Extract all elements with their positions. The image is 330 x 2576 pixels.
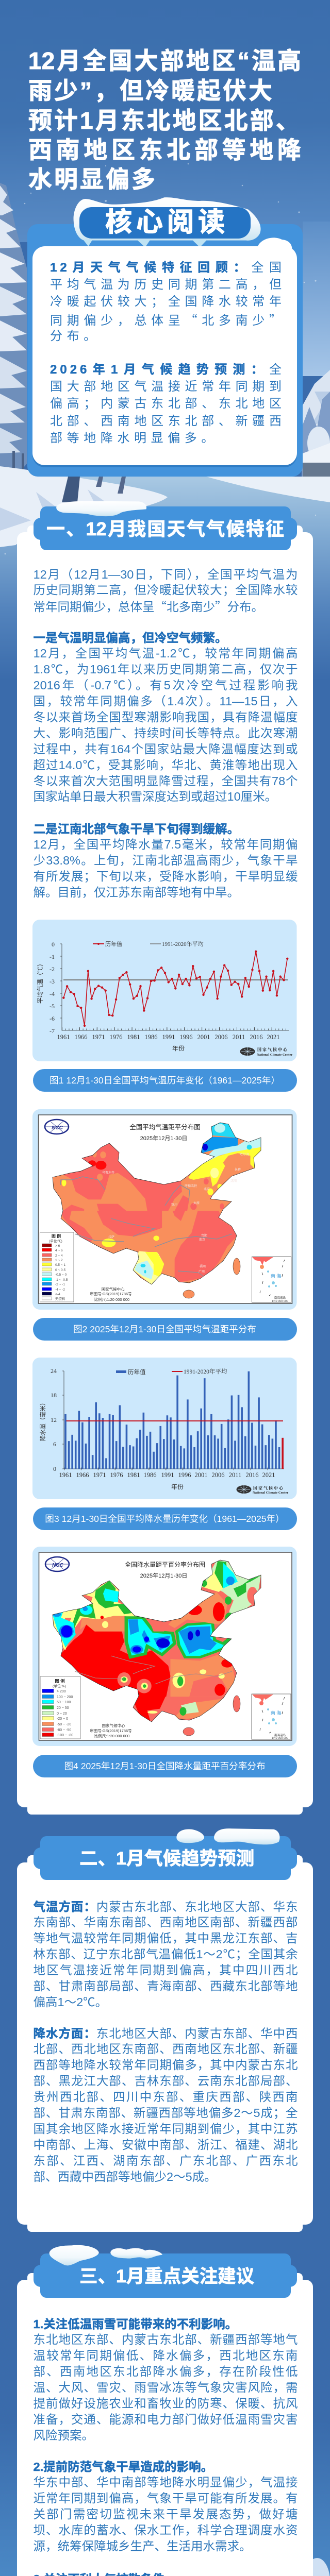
title: 12月全国大部地区“温高 — [28, 47, 301, 74]
text: January outlook: 偏高；内蒙古东北部、东北地区 — [50, 397, 285, 411]
legend: precipitation anomaly — [40, 1676, 80, 1739]
text: January outlook: 北部、西南地区东北部、新疆西 — [50, 414, 285, 428]
x axis labels: 1976 — [110, 1471, 123, 1479]
text: advice one: 准备，交通、能源和电力部门做好低温雨雪灾害 — [33, 2413, 298, 2426]
city labels: 银川 — [171, 1202, 177, 1207]
logo: National Climate Center: 国家气候中心 — [253, 1485, 284, 1490]
text: temperature findings: 2016年（-0.7℃）。有5次冷空气过程影响我 — [33, 679, 298, 692]
heading: section three — [34, 2245, 297, 2298]
city labels: 北京 — [204, 1187, 210, 1191]
legend: temperature anomaly: -2 ~ -1 — [55, 1283, 65, 1286]
text: precipitation outlook: 东部、江西、湖南东部、广东北部、广西东北 — [33, 2154, 298, 2167]
city labels: 乌鲁木齐 — [102, 1171, 114, 1175]
text: drought findings — [33, 822, 298, 899]
inset: South China Sea: 1:40 000 000 — [272, 1300, 288, 1303]
x axis labels: 2011 — [233, 1033, 245, 1041]
x axis labels: 1961 — [57, 1033, 70, 1041]
text: advice two — [33, 2460, 298, 2553]
logo: National Climate Center: National Climate Center — [257, 1053, 292, 1057]
legend: precipitation anomaly: 0 ~ 20 — [57, 1712, 67, 1716]
y axis labels: 24 — [51, 1367, 57, 1375]
caption: figure 1 — [33, 1069, 297, 1092]
text: January outlook: 部等地降水明显偏多。 — [50, 431, 218, 445]
y axis title: 平均气温（℃） — [36, 960, 44, 1004]
text: section one intro: 12月（12月1—30日，下同），全国平均气温为 — [33, 568, 298, 581]
text: advice one: 提前做好设施农业和畜牧业的防寒、保暖、抗风 — [33, 2397, 298, 2410]
legend: precipitation anomaly: 图 例 — [55, 1679, 65, 1684]
legend: temperature chart: 历年值 — [105, 940, 122, 947]
x axis labels: 2016 — [250, 1033, 263, 1041]
legend: precipitation anomaly: -50 ~ -20 — [57, 1723, 71, 1726]
x axis labels: 2021 — [262, 1471, 275, 1479]
legend: temperature anomaly: 图 例 — [52, 1233, 61, 1239]
text: drought findings: 解。目前，仅江苏东南部等地有中旱。 — [33, 886, 239, 899]
text: temperature outlook: 部、甘肃南部局部、青海南部、西藏东北部等地 — [33, 1979, 298, 1993]
x axis labels: 1981 — [127, 1471, 140, 1479]
text: precipitation outlook: 中南部、上海、安徽中南部、浙江、福建、湖北 — [33, 2138, 298, 2151]
text: precipitation outlook: 北部、西北地区东南部、西南地区东北部、新疆 — [33, 2042, 298, 2056]
x axis labels: 1996 — [179, 1033, 193, 1041]
legend: temperature anomaly — [40, 1232, 74, 1302]
text: precipitation outlook: 降水方面：东北地区大部、内蒙古东部、华中西 — [33, 2027, 298, 2040]
map: precipitation anomaly percentage distribution — [32, 1547, 297, 1746]
text: temperature findings: 国，较常年同期偏多（1.4次）。11—15日，入 — [33, 694, 298, 708]
map credits — [90, 1723, 132, 1738]
text: drought findings: 二是江南北部气象干旱下旬得到缓解。 — [33, 822, 239, 836]
outline and rivers — [53, 1560, 261, 1722]
map credits: 国家气候中心 — [102, 1723, 125, 1728]
heading: section two: 二、1月气候趋势预测 — [79, 1848, 254, 1869]
y axis labels: -6 — [50, 1015, 55, 1022]
text: drought findings: 12月，全国平均降水量7.5毫米，较常年同期偏 — [33, 838, 298, 851]
text: temperature outlook: 林东部、辽宁东北部气温偏低1～2℃；全国其余 — [33, 1947, 298, 1961]
inset: South China Sea: 南海诸岛 — [274, 1733, 286, 1737]
icon: right forest and cabin — [296, 392, 330, 479]
text: temperature findings: 过程中，共有164个国家站最大降温幅度达到或 — [33, 742, 298, 756]
inset: South China Sea — [252, 1694, 291, 1740]
text: precipitation outlook: 部、黑龙江大部、吉林东部、云南东北部局部、 — [33, 2074, 298, 2088]
text: precipitation outlook: 部、甘肃东南部、新疆西部等地偏多2～5成；全 — [33, 2106, 298, 2120]
y axis title: 降水量（毫米） — [39, 1400, 46, 1441]
inset: South China Sea — [252, 1257, 291, 1303]
title — [28, 47, 302, 193]
text: temperature findings: 12月，全国平均气温-1.2℃，较常年同期偏高 — [33, 647, 298, 660]
bar chart: national mean precipitation 1961-2025 — [32, 1358, 297, 1499]
y axis labels: 18 — [51, 1392, 57, 1399]
text: temperature findings: 一是气温明显偏高，但冷空气频繁。 — [33, 631, 227, 644]
city labels: 拉萨 — [108, 1235, 114, 1239]
text: advice two: 近常年同期到偏高，气象干旱可能有所发展。有 — [33, 2492, 298, 2505]
text: temperature outlook: 气温方面：内蒙古东北部、东北地区大部、华东 — [33, 1900, 298, 1913]
x axis labels: 1991 — [161, 1471, 174, 1479]
legend: precipitation anomaly: -80 ~ -50 — [57, 1728, 71, 1732]
caption: figure 3: 图3 12月1-30日全国平均降水量历年变化（1961—2025年） — [45, 1514, 285, 1524]
legend: precipitation anomaly: 20 ~ 50 — [57, 1706, 69, 1710]
x axis labels: 1981 — [127, 1033, 140, 1041]
map credits: 比例尺:1:20 000 000 — [94, 1733, 129, 1738]
text: section one intro — [33, 568, 298, 615]
caption: figure 4 — [33, 1755, 297, 1777]
legend: temperature anomaly: 1 ~ 2 — [55, 1259, 63, 1262]
legend: temperature anomaly: 无资料 — [55, 1296, 65, 1301]
outline and rivers — [53, 1123, 261, 1284]
city labels — [102, 1153, 249, 1274]
legend: temperature chart: 1991-2020年平均 — [162, 940, 204, 947]
text: advice one: 部、西南地区东北部降水偏多，存在阶段性低 — [33, 2365, 298, 2378]
text: advice one: 1.关注低温雨雪可能带来的不利影响。 — [33, 2317, 237, 2331]
x axis labels: 1971 — [92, 1033, 105, 1041]
caption: figure 3 — [33, 1507, 297, 1530]
y axis labels — [51, 1367, 57, 1472]
y axis labels: 12 — [51, 1416, 57, 1423]
y axis labels: -1 — [50, 953, 55, 960]
legend: temperature anomaly: -4 ~ -2 — [55, 1288, 65, 1292]
logo: NCC — [45, 1557, 69, 1571]
x axis labels: 2006 — [214, 1033, 228, 1041]
legend: precipitation chart: 历年值 — [128, 1368, 146, 1376]
icon: right mountain — [302, 370, 330, 479]
text: section one intro: 常年同期偏少，总体呈“北多南少”分布。 — [33, 597, 263, 615]
x axis labels: 1986 — [144, 1033, 158, 1041]
x axis labels — [57, 1033, 279, 1041]
card: core reading white box — [32, 246, 297, 465]
text: advice one: 温较常年同期偏低、降水偏多，西北地区东南 — [33, 2349, 298, 2362]
text: temperature findings: 1.8℃，为1961年以来历史同期第二高，仅次于 — [33, 663, 298, 676]
icon: right side snow foliage — [299, 2558, 330, 2576]
text: advice one: 东北地区东部、内蒙古东北部、新疆西部等地气 — [33, 2333, 298, 2346]
text: advice one — [33, 2317, 298, 2442]
text: precipitation outlook: 贵州西北部、四川中东部、重庆西部、陕西南 — [33, 2090, 298, 2104]
bars — [65, 1371, 283, 1469]
text: temperature findings: 国家站单日最大积雪深度达到或超过10厘米。 — [33, 790, 277, 803]
inset: South China Sea: 1:40 000 000 — [272, 1737, 288, 1740]
legend: temperature anomaly: (单位:℃) — [49, 1239, 62, 1243]
line chart: national mean temperature 1961-2025 — [32, 920, 297, 1061]
x axis labels: 1991 — [162, 1033, 175, 1041]
city labels: 南京 — [199, 1238, 205, 1242]
map regions — [53, 1123, 261, 1284]
legend: temperature anomaly: <-4 — [55, 1293, 60, 1296]
x axis labels: 2016 — [245, 1471, 259, 1479]
text: temperature outlook: 等地气温较常年同期偏低，其中黑龙江东部、吉 — [33, 1931, 298, 1945]
text: December review: 分布。 — [50, 329, 101, 343]
title: 预计1月东北地区北部、 — [28, 107, 302, 134]
map title — [129, 1123, 201, 1142]
legend: temperature anomaly: > 6 — [55, 1244, 60, 1248]
y axis labels: 0 — [52, 941, 55, 948]
legend: precipitation anomaly: 100 ~ 200 — [57, 1696, 73, 1699]
text: January outlook: 国大部地区气温接近常年同期到 — [50, 380, 285, 394]
caption: figure 1: 图1 12月1-30日全国平均气温历年变化（1961—2025年） — [50, 1075, 280, 1086]
x axis labels: 1966 — [74, 1033, 88, 1041]
x axis labels: 1976 — [109, 1033, 123, 1041]
city labels: 合肥 — [201, 1233, 207, 1238]
legend: precipitation anomaly: > 200 — [57, 1690, 66, 1693]
inset: South China Sea: 南海诸岛 — [274, 1296, 286, 1300]
city labels: 福州 — [200, 1264, 206, 1268]
text: advice two: 关部门需密切监视未来干旱发展态势，做好塘 — [33, 2507, 298, 2521]
inset: South China Sea: 南 海 — [271, 1273, 281, 1279]
heading: section two — [34, 1828, 297, 1880]
map title: 2025年12月1-30日 — [140, 1134, 187, 1142]
caption: figure 2 — [33, 1318, 297, 1341]
text: precipitation outlook: 国其余地区降水接近常年同期到偏少，其中江苏 — [33, 2122, 298, 2136]
text: temperature findings: 超过14.0℃，受其影响，华北、黄淮等地出现入 — [33, 758, 298, 772]
text: temperature findings: 冬以来首场全国型寒潮影响我国，具有降温幅度 — [33, 710, 298, 724]
text: December review: 平均气温为历史同期第二高，但 — [50, 278, 285, 292]
x axis labels: 2011 — [229, 1471, 241, 1479]
logo: NCC: NCC — [52, 1563, 64, 1568]
logo: NCC: NCC — [52, 1125, 63, 1131]
series: yearly temperature — [63, 952, 287, 1026]
city labels: 太原 — [193, 1201, 200, 1205]
title: 西南地区东北部等地降 — [28, 137, 301, 163]
legend: precipitation chart — [116, 1368, 227, 1376]
heading: section three: 三、1月重点关注建议 — [79, 2266, 254, 2286]
legend: precipitation anomaly: -100 ~ -80 — [57, 1734, 73, 1737]
mean line — [66, 1420, 283, 1421]
map title: 全国平均气温距平分布图 — [129, 1123, 201, 1131]
snowflake dots — [5, 163, 317, 554]
icon: snow pine tree — [0, 183, 27, 482]
text: advice two: 源，统筹保障城乡生产、生活用水需求。 — [33, 2539, 252, 2553]
heading: core reading pill — [79, 207, 251, 239]
text: drought findings: 少33.8%。上旬，江南北部温高雨少，气象干旱 — [33, 854, 298, 867]
map credits: 审图号:GS(2019)1786号 — [90, 1291, 132, 1296]
legend: precipitation chart: 1991-2020年平均 — [184, 1368, 227, 1375]
x axis title: 年份 — [172, 1045, 185, 1052]
y axis labels — [50, 941, 55, 1035]
text: temperature findings — [33, 631, 298, 803]
y axis labels: -4 — [50, 990, 55, 997]
bottom winter scene background — [0, 2464, 330, 2576]
logo: National Climate Center: 国家气候中心 — [257, 1047, 288, 1052]
legend: temperature anomaly: 4 ~ 6 — [55, 1249, 63, 1252]
text: section one intro: 历史同期第二高，但冷暖起伏较大；全国降水较 — [33, 583, 298, 597]
map credits: 国家气候中心 — [101, 1286, 125, 1292]
x axis labels — [59, 1471, 275, 1479]
islands: Taiwan and Hainan — [183, 1696, 240, 1736]
text: precipitation outlook — [33, 2027, 298, 2183]
title: 水明显偏多 — [28, 166, 157, 193]
panel: section one card — [17, 526, 313, 1815]
y axis labels: -3 — [50, 978, 55, 985]
panel: section two card — [17, 1855, 313, 2232]
x axis labels: 2006 — [211, 1471, 225, 1479]
city labels: 呼和浩特 — [185, 1184, 197, 1188]
text: January outlook: 2026年1月气候趋势预测：全 — [50, 363, 285, 377]
x axis labels: 2021 — [267, 1033, 279, 1041]
legend: temperature anomaly: 0 ~ 0.5 — [55, 1268, 65, 1272]
caption: figure 4: 图4 2025年12月1-30日全国降水量距平百分率分布 — [64, 1761, 266, 1771]
panel: section three card — [17, 2273, 313, 2576]
text: advice two: 2.提前防范气象干旱造成的影响。 — [33, 2460, 213, 2473]
caption: figure 2: 图2 2025年12月1-30日全国平均气温距平分布 — [73, 1324, 256, 1334]
text: December review — [50, 261, 285, 343]
text: temperature outlook: 东南部、华南东南部、西南地区南部、新疆西部 — [33, 1916, 298, 1929]
inset: South China Sea: 南 海 — [271, 1710, 281, 1716]
x axis labels: 1966 — [76, 1471, 89, 1479]
x axis labels: 1971 — [93, 1471, 106, 1479]
text: advice two: 华东中部、华中南部等地降水明显偏少，气温接 — [33, 2476, 298, 2489]
y axis labels: -5 — [50, 1003, 55, 1010]
text: temperature outlook — [33, 1900, 298, 2009]
legend: temperature anomaly: 0.5 ~ 1 — [55, 1263, 65, 1267]
top winter scene background — [0, 126, 330, 657]
text: January outlook — [50, 363, 285, 445]
legend: precipitation anomaly: 50 ~ 100 — [57, 1701, 71, 1704]
map: temperature anomaly distribution — [32, 1109, 297, 1310]
logo: National Climate Center — [236, 1485, 288, 1495]
x axis title: 年份 — [171, 1483, 184, 1490]
legend: precipitation anomaly: -20 ~ 0 — [57, 1717, 68, 1721]
x axis labels: 1961 — [59, 1471, 72, 1479]
x axis labels: 1996 — [178, 1471, 191, 1479]
text: temperature outlook: 地区气温接近常年同期到偏高，其中四川西北 — [33, 1963, 298, 1977]
y axis labels: -7 — [50, 1027, 55, 1035]
text: precipitation outlook: 部、西藏中西部等地偏少2～5成。 — [33, 2170, 217, 2183]
map title: 2025年12月1-30日 — [140, 1572, 187, 1579]
map credits — [90, 1286, 132, 1302]
text: advice one: 风险预案。 — [33, 2429, 94, 2442]
legend: temperature chart — [93, 940, 204, 947]
axes — [60, 944, 289, 1030]
legend: temperature anomaly: -0.5 ~ 0 — [55, 1273, 67, 1277]
y axis labels: 6 — [53, 1440, 56, 1448]
x axis labels: 2001 — [195, 1471, 207, 1479]
text: advice two: 坝、水库的蓄水、保水工作，科学合理调度水资 — [33, 2523, 298, 2537]
panel: core reading — [27, 197, 303, 477]
legend: temperature anomaly: 2 ~ 4 — [55, 1254, 63, 1258]
icon: snow on core heading — [73, 197, 292, 249]
map credits: 审图号:GS(2019)1786号 — [90, 1728, 132, 1733]
map title: 全国降水量距平百分率分布图 — [125, 1561, 205, 1568]
legend: temperature anomaly: -1 ~ -0.5 — [55, 1278, 68, 1282]
logo: National Climate Center — [240, 1047, 292, 1057]
text: advice one: 温、大风、雪灾、雨雪冰冻等气象灾害风险，需 — [33, 2381, 298, 2394]
title: 雨少”，但冷暖起伏大 — [28, 77, 274, 104]
text: temperature findings: 大、影响范围广、持续时间长等特点。此次寒潮 — [33, 726, 298, 740]
mean line — [63, 979, 288, 980]
text: precipitation outlook: 西部等地降水较常年同期偏多，其中内蒙古东北 — [33, 2058, 298, 2072]
map title — [125, 1561, 205, 1579]
text: December review: 冷暖起伏较大；全国降水较常年 — [50, 295, 285, 309]
city labels: 长春 — [235, 1167, 241, 1172]
text: December review: 同期偏少，总体呈“北多南少” — [50, 310, 285, 328]
heading: section one: 一、12月我国天气气候特征 — [46, 518, 284, 539]
map credits: 比例尺:1:20 000 000 — [94, 1297, 129, 1302]
map regions — [53, 1560, 261, 1722]
y axis labels: -2 — [50, 965, 55, 973]
legend: precipitation anomaly: (单位:%) — [53, 1684, 66, 1688]
y axis labels: 0 — [53, 1465, 56, 1472]
x axis labels: 1986 — [143, 1471, 157, 1479]
text: December review: 12月天气气候特征回顾：全国 — [50, 261, 285, 275]
islands: Taiwan and Hainan — [183, 1258, 240, 1298]
heading: core reading pill: 核心阅读 — [105, 208, 229, 238]
x axis labels: 2001 — [197, 1033, 210, 1041]
logo: National Climate Center: National Climate Center — [253, 1491, 288, 1495]
icon: snowy ground and river bank — [0, 466, 330, 547]
text: temperature findings: 冬以来首次大范围明显降雪过程，全国共有78个 — [33, 774, 298, 788]
city labels: 沈阳 — [230, 1179, 237, 1183]
logo: NCC — [45, 1120, 69, 1134]
text: temperature outlook: 偏高1～2℃。 — [33, 1995, 107, 2009]
city labels: 广州 — [199, 1269, 205, 1274]
heading: section one — [34, 501, 297, 550]
axes — [62, 1371, 284, 1469]
city labels: 哈尔滨 — [240, 1153, 249, 1157]
text: drought findings: 有所发展；下旬以来，受降水影响，干旱明显缓 — [33, 870, 298, 883]
